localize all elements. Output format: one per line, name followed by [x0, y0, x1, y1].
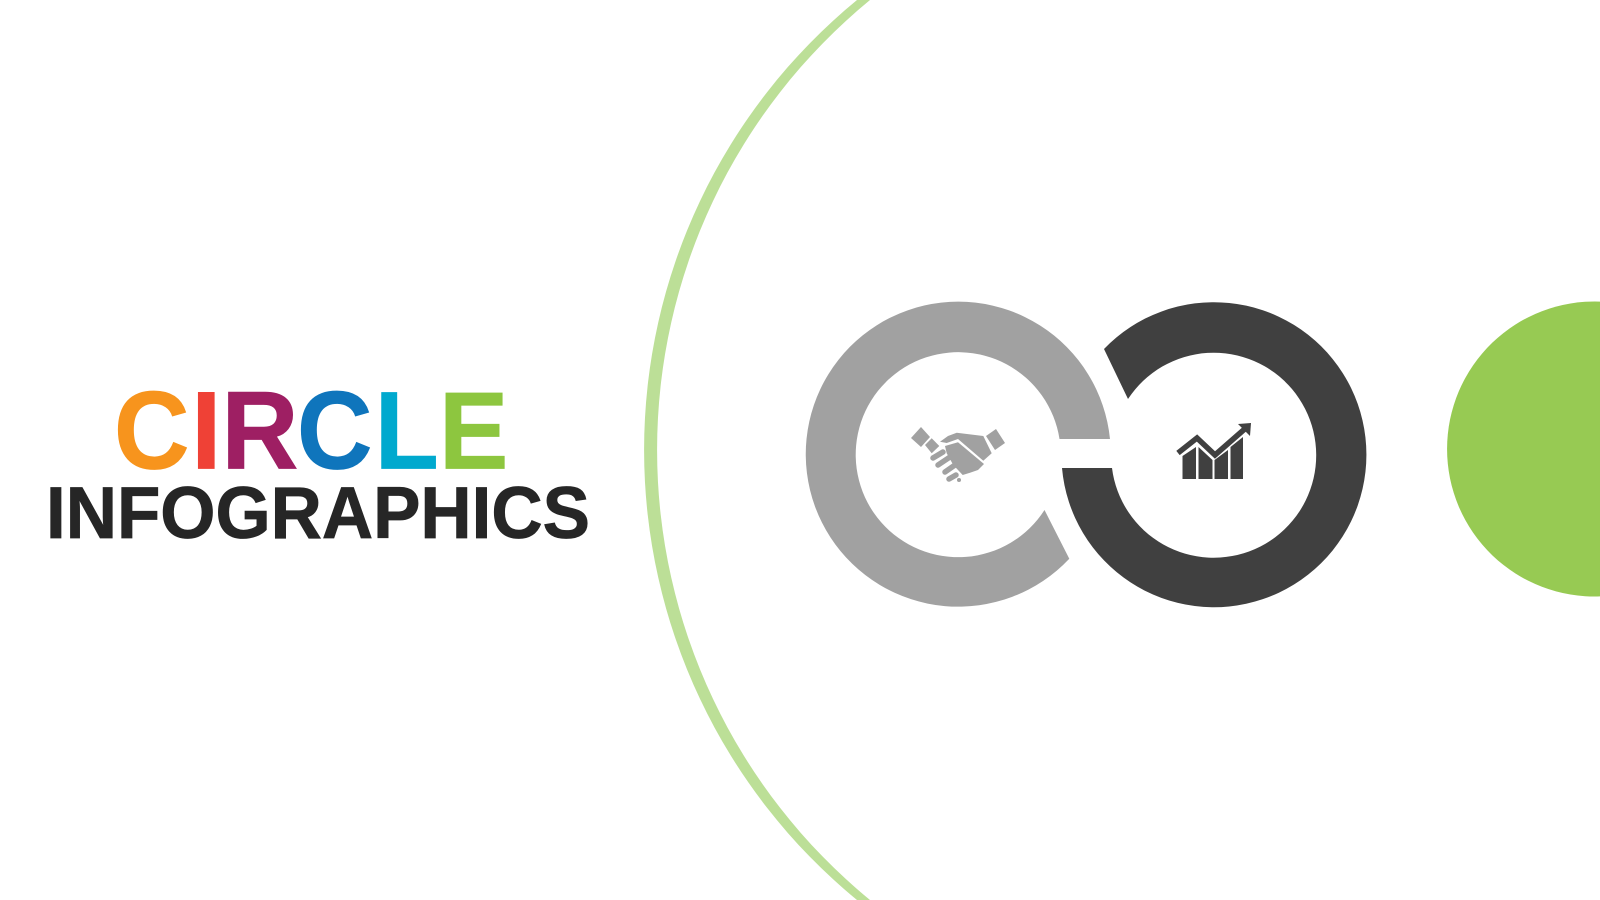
left cuff — [911, 427, 930, 447]
large light green arc — [644, 0, 870, 900]
title line: CIRCLE — [114, 369, 508, 492]
arrow head — [1238, 423, 1251, 436]
clasped hand — [945, 442, 984, 475]
title line: CIRCLE: L — [375, 369, 439, 492]
trend line — [1178, 427, 1247, 455]
title line: CIRCLE: C — [297, 369, 372, 492]
bars — [1182, 447, 1196, 479]
green half circle at right edge — [1447, 302, 1600, 596]
title line: INFOGRAPHICS: INFOGRAPHICS — [46, 473, 590, 554]
title line: CIRCLE: C — [114, 369, 189, 492]
interlocked fingers — [933, 452, 956, 479]
icon: handshake — [911, 427, 1005, 482]
title — [46, 369, 590, 554]
icon: rising bar chart — [1178, 423, 1251, 479]
left wrist — [925, 438, 939, 453]
title line: CIRCLE: I — [191, 370, 222, 492]
right cuff — [986, 429, 1005, 450]
title line: CIRCLE: R — [221, 369, 298, 492]
small fingertip — [957, 478, 961, 482]
dark gray ring segment — [1062, 302, 1366, 607]
upper hand and sleeve — [940, 433, 992, 461]
title line: CIRCLE: E — [439, 369, 508, 492]
light gray ring segment — [806, 302, 1110, 607]
